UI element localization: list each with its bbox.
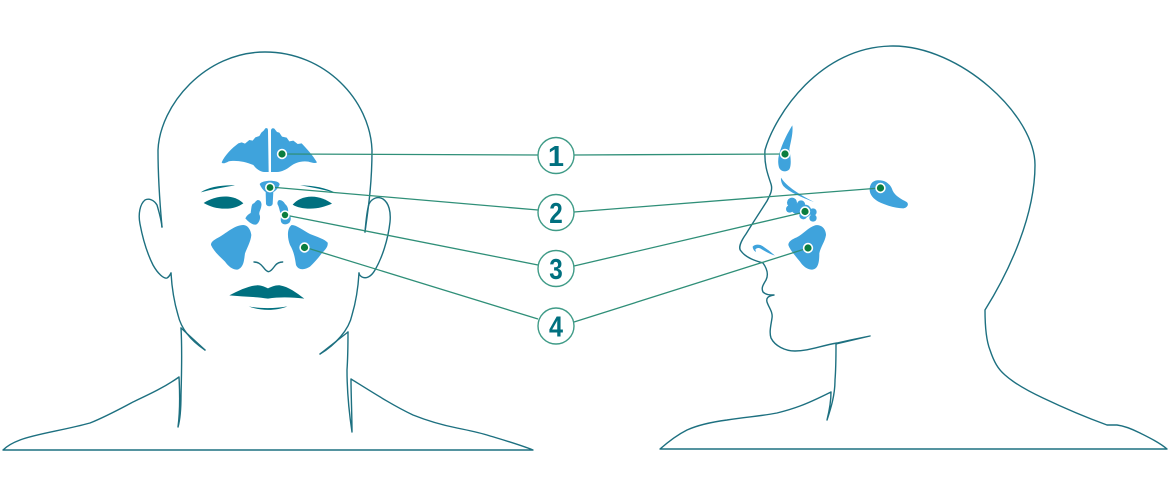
left maxillary sinus (211, 225, 251, 270)
right ethmoid (277, 200, 291, 224)
right maxillary sinus (288, 225, 328, 269)
number 1: 1 (548, 141, 564, 173)
side sinuses (753, 125, 908, 270)
number 3: 3 (549, 254, 563, 286)
facial features (201, 185, 335, 310)
mouth (229, 285, 304, 299)
number 3 (538, 250, 574, 286)
right eye (293, 197, 332, 209)
side view head (660, 46, 1167, 449)
left eye (204, 197, 243, 209)
right eyebrow (300, 185, 335, 193)
nostril (753, 245, 775, 256)
number 1 (538, 138, 574, 174)
side head outline (660, 46, 1167, 449)
nasal passage curve (781, 178, 814, 202)
left ear (139, 199, 171, 278)
frontal sinus (222, 128, 317, 172)
lower lip (249, 306, 287, 310)
ethmoid cluster (786, 198, 817, 222)
number 2: 2 (549, 198, 563, 230)
maxillary sinus side (788, 225, 826, 270)
sphenoid sinus side (870, 180, 908, 208)
sphenoid sinus (260, 181, 280, 206)
left ethmoid (245, 200, 262, 225)
number 4 (538, 308, 574, 344)
left eyebrow (201, 185, 235, 192)
number 2 (538, 194, 574, 230)
leader lines (270, 154, 880, 322)
front head outline (3, 52, 533, 450)
front sinuses (211, 128, 328, 270)
leader endpoint dots (266, 150, 885, 252)
right ear (359, 198, 390, 278)
number 4: 4 (549, 312, 563, 344)
frontal sinus side (778, 125, 793, 171)
nose (254, 262, 283, 272)
front view head (3, 52, 533, 450)
